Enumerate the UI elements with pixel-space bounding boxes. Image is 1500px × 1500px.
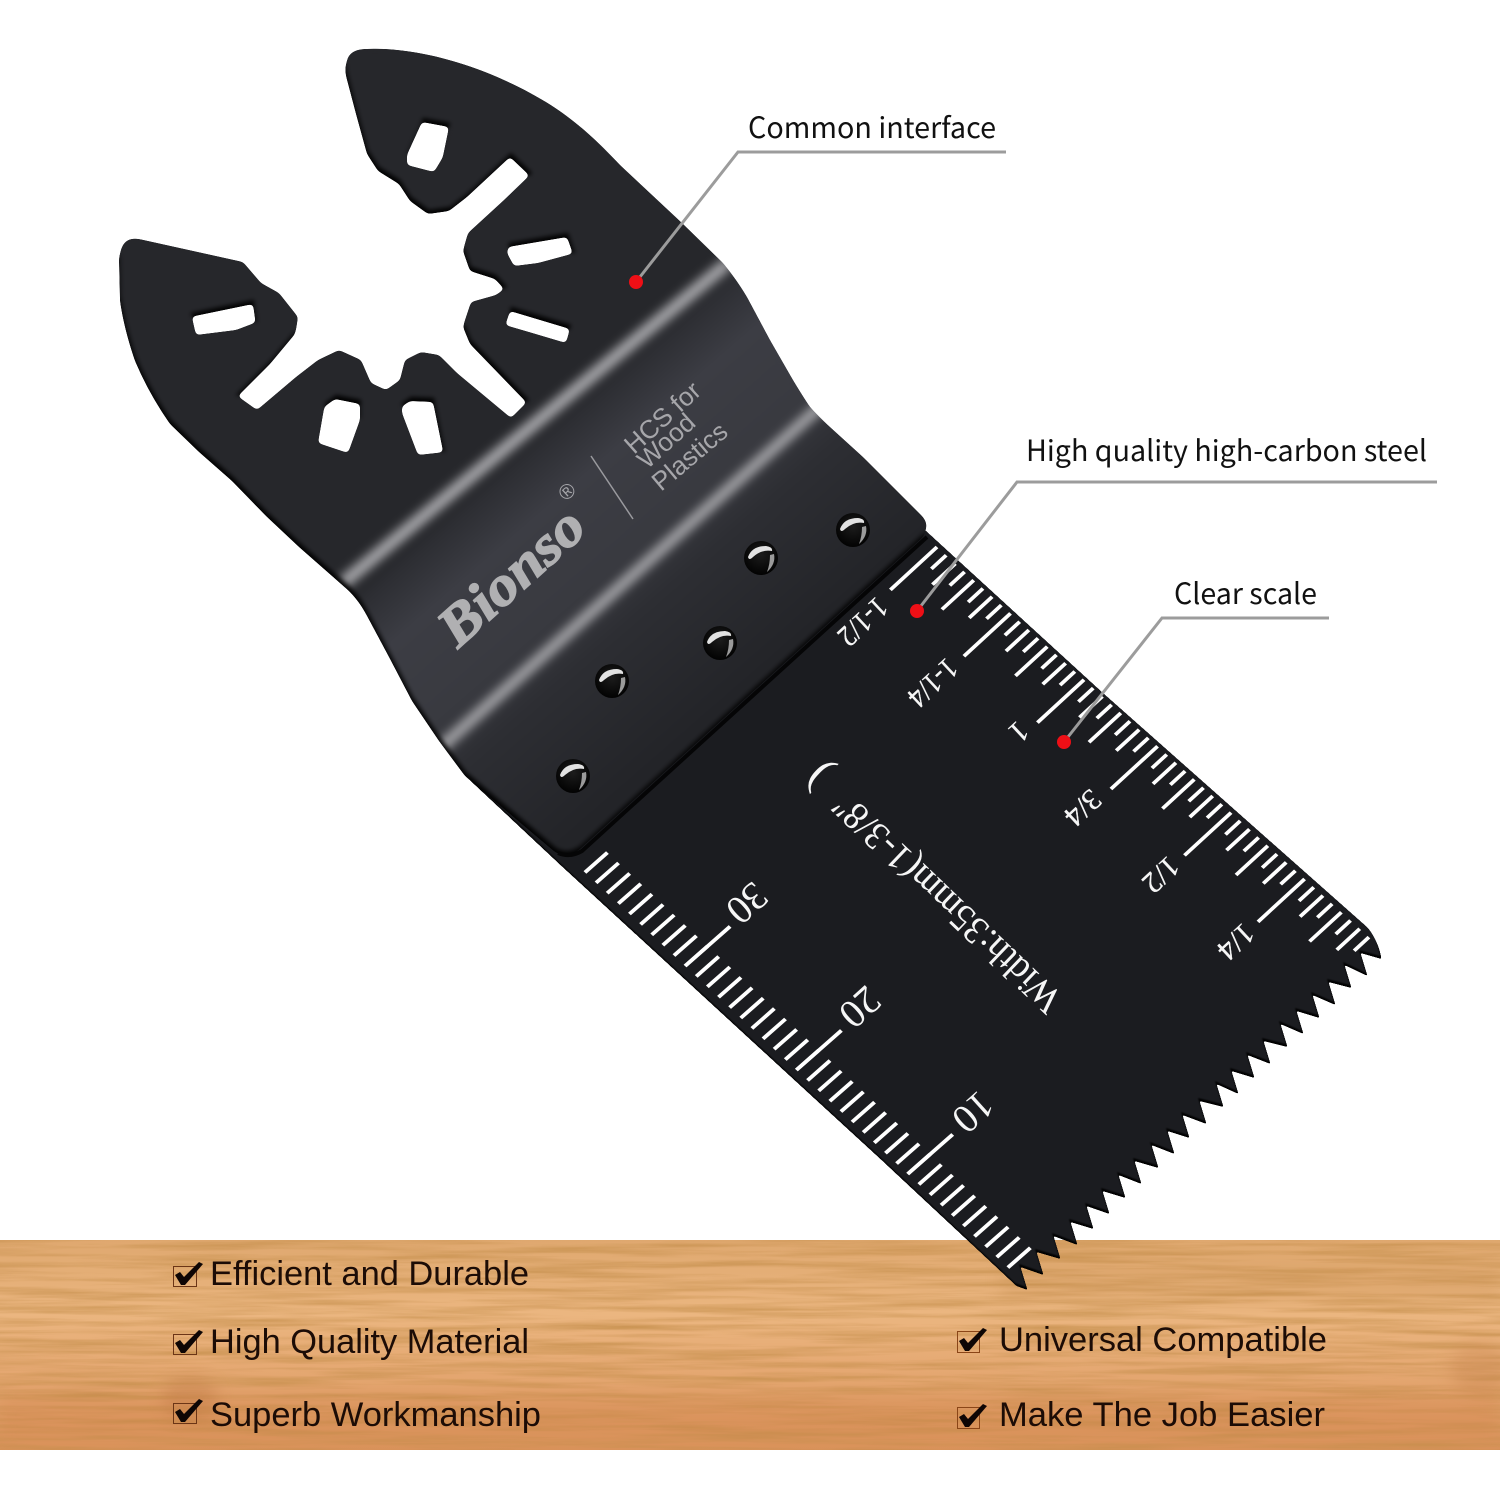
inch scale labels: 1-1/2	[831, 590, 894, 653]
metric scale labels: 30	[717, 873, 777, 933]
plate lower shadow edge	[558, 537, 927, 855]
inch scale ticks	[912, 553, 1363, 960]
logo divider	[591, 456, 633, 519]
feature: superb workmanship: Superb Workmanship	[210, 1396, 541, 1434]
feature: high quality material: High Quality Material	[210, 1323, 529, 1361]
inch scale labels: 3/4	[1057, 782, 1108, 833]
brand logo: ®	[554, 478, 581, 506]
interface and mounting plate	[119, 49, 926, 855]
callout: common interface	[629, 105, 1006, 289]
metric scale labels: 20	[830, 977, 890, 1037]
bend highlights	[343, 263, 822, 750]
width label: )	[794, 754, 840, 802]
inch scale labels: 1/4	[1210, 916, 1261, 967]
inch scale labels: 1-1/4	[901, 651, 964, 714]
brand logo: Bionso	[424, 495, 597, 659]
feature: universal compatible: Universal Compatible	[999, 1321, 1327, 1359]
blade body with teeth	[466, 530, 1382, 1290]
inch scale labels	[831, 590, 1261, 967]
blade material text	[618, 375, 733, 497]
width label: Width:35mm(1-3/8″	[823, 784, 1070, 1022]
saw blade	[119, 49, 1382, 1290]
inch scale labels: 1	[1002, 714, 1035, 749]
callout: clear scale	[1057, 571, 1329, 749]
rivets	[556, 513, 870, 793]
metric scale ticks	[594, 851, 1032, 1259]
metric scale labels	[717, 873, 1003, 1142]
blade material text: HCS for	[618, 375, 707, 459]
blade material text: Plastics	[646, 416, 733, 497]
inch scale labels: 1/2	[1135, 849, 1186, 900]
callout: high-carbon steel	[910, 428, 1437, 618]
metric scale labels: 10	[943, 1082, 1003, 1142]
blade material text: Wood	[631, 407, 701, 474]
callout: clear scale: Clear scale	[1174, 571, 1317, 613]
panel: wood plank	[0, 1240, 1500, 1450]
callout: common interface: Common interface	[748, 105, 996, 147]
callout: high-carbon steel: High quality high-carbon steel	[1026, 428, 1427, 470]
feature: efficient and durable: Efficient and Durable	[210, 1255, 529, 1293]
feature: make the job easier: Make The Job Easier	[999, 1396, 1325, 1434]
